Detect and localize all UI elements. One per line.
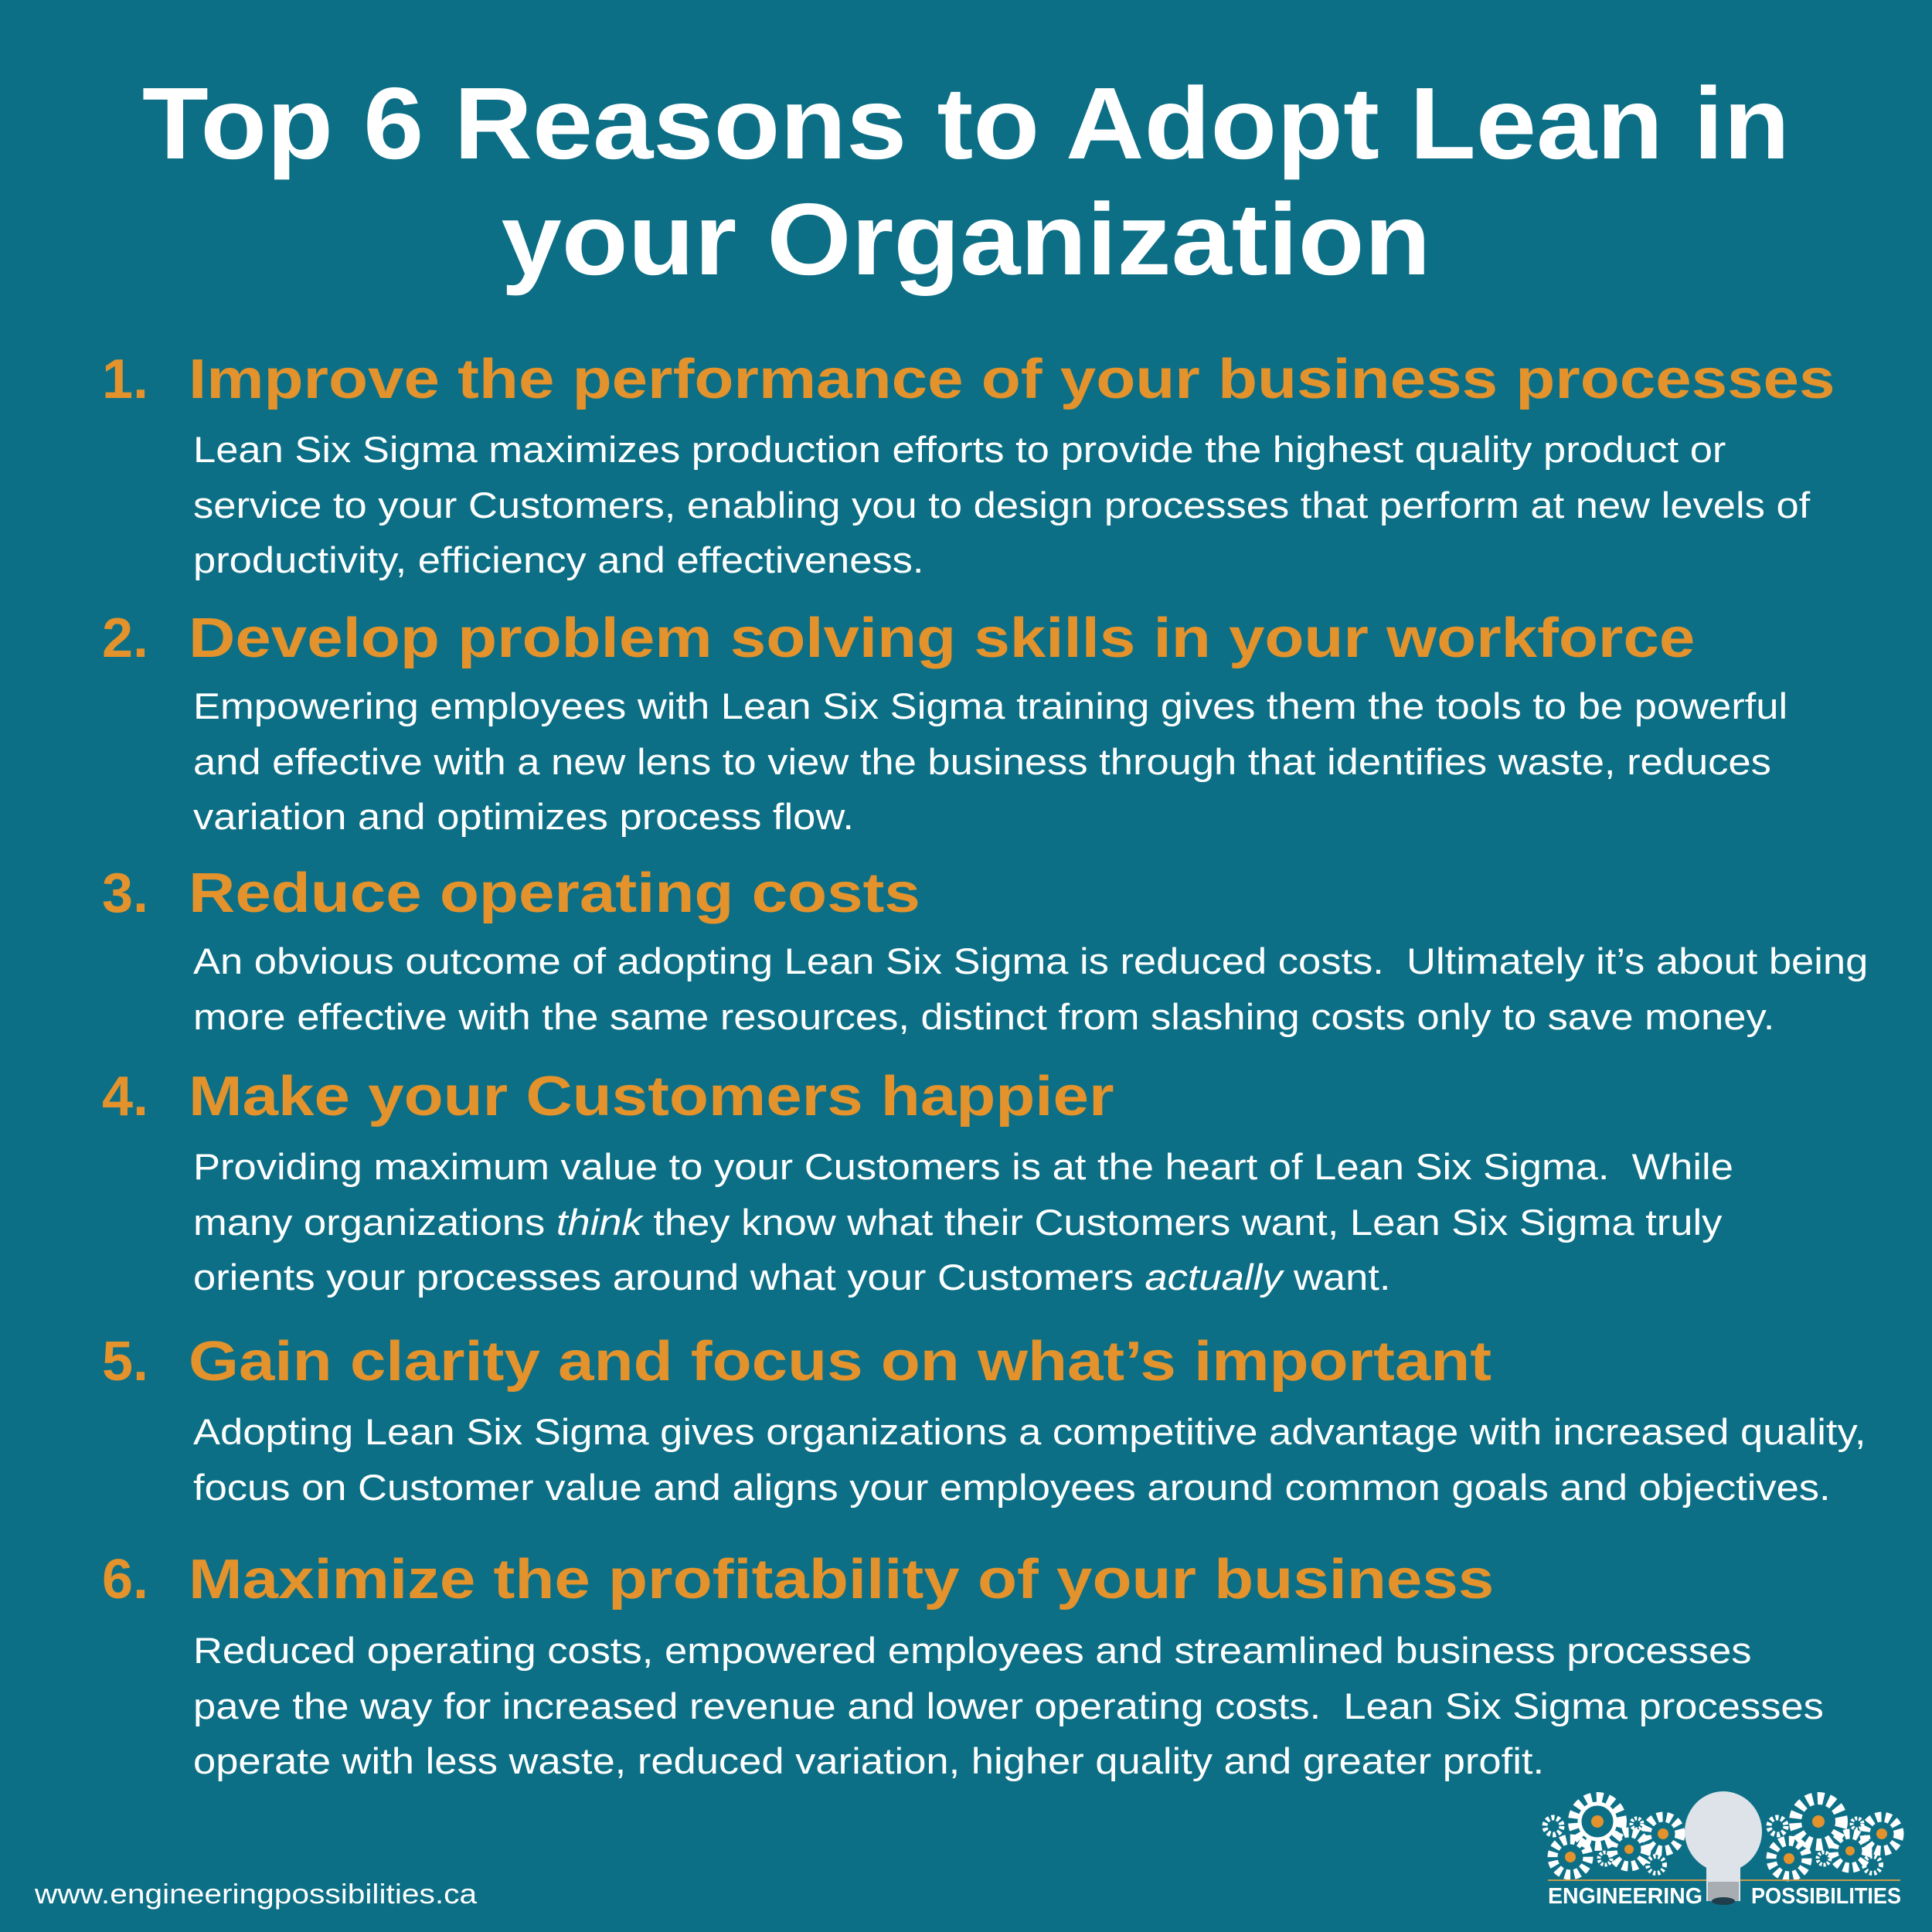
footer url: www.engineeringpossibilities.ca <box>35 1878 477 1910</box>
body 1: service to your Customers, enabling you to design processes that perform at new levels of <box>193 484 1810 526</box>
body 2: and effective with a new lens to view the business through that identifies waste, reduces <box>193 740 1771 782</box>
body 1: productivity, efficiency and effectiveness. <box>193 539 924 580</box>
heading 5: Gain clarity and focus on what’s important <box>189 1331 1492 1393</box>
logo <box>1543 1791 1904 1909</box>
logo: ENGINEERING <box>1548 1884 1702 1909</box>
title: your Organization <box>502 182 1430 296</box>
body 5: Adopting Lean Six Sigma gives organizations a competitive advantage with increased quality, <box>193 1411 1866 1452</box>
body 5: focus on Customer value and aligns your employees around common goals and objectives. <box>193 1467 1831 1507</box>
body 3: An obvious outcome of adopting Lean Six Sigma is reduced costs. Ultimately it’s about being <box>193 940 1868 981</box>
heading 6: Maximize the profitability of your business <box>189 1549 1494 1611</box>
body 6: Reduced operating costs, empowered employees and streamlined business processes <box>193 1630 1751 1671</box>
heading 3: 3. <box>102 862 148 924</box>
title <box>142 66 1790 296</box>
body 4: Providing maximum value to your Customers is at the heart of Lean Six Sigma. While <box>193 1146 1733 1187</box>
body 2: Empowering employees with Lean Six Sigma training gives them the tools to be powerful <box>193 685 1787 726</box>
body 1: Lean Six Sigma maximizes production efforts to provide the highest quality product or <box>193 429 1726 470</box>
body 1 <box>193 429 1810 580</box>
body 2 <box>193 685 1787 837</box>
heading 2: Develop problem solving skills in your workforce <box>189 607 1695 669</box>
body 6: operate with less waste, reduced variation, higher quality and greater profit. <box>193 1740 1544 1781</box>
heading 4: Make your Customers happier <box>189 1066 1114 1128</box>
body 6: pave the way for increased revenue and lower operating costs. Lean Six Sigma processes <box>193 1685 1824 1726</box>
heading 3: Reduce operating costs <box>189 862 920 924</box>
heading 6: 6. <box>102 1549 148 1611</box>
body 2: variation and optimizes process flow. <box>193 796 854 837</box>
body 3: more effective with the same resources, distinct from slashing costs only to save money. <box>193 995 1774 1037</box>
logo: POSSIBILITIES <box>1751 1884 1901 1909</box>
body 4: many organizations think they know what their Customers want, Lean Six Sigma truly <box>193 1201 1722 1243</box>
heading 1: 1. <box>102 349 148 410</box>
body 4: orients your processes around what your Customers actually want. <box>193 1257 1390 1298</box>
body 3 <box>193 940 1868 1037</box>
heading 5: 5. <box>102 1331 148 1393</box>
heading 2: 2. <box>102 607 148 669</box>
body 4 <box>193 1146 1733 1298</box>
body 5 <box>193 1411 1866 1508</box>
body 6 <box>193 1630 1824 1781</box>
heading 4: 4. <box>102 1066 148 1128</box>
heading 1: Improve the performance of your business processes <box>189 349 1835 410</box>
title: Top 6 Reasons to Adopt Lean in <box>142 66 1790 180</box>
